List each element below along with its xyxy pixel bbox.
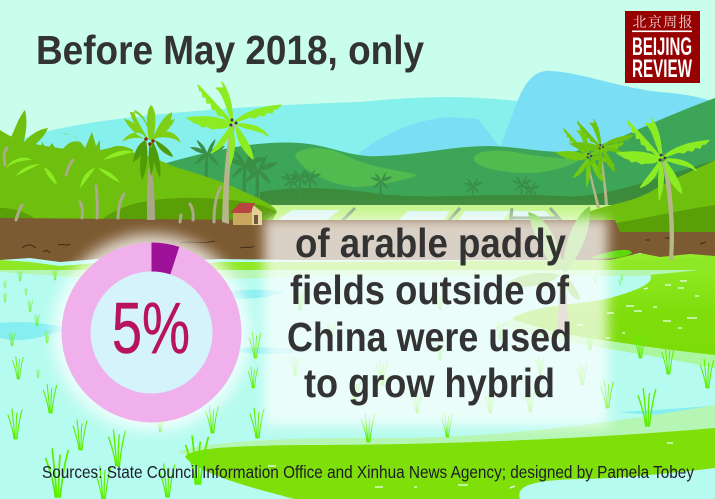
field flecks (268, 269, 700, 488)
left hills (0, 130, 277, 225)
green bank under soil (0, 256, 715, 270)
right green field (512, 250, 715, 358)
coconut palm (122, 105, 181, 220)
white text panel glow (264, 218, 608, 426)
right hill (582, 160, 715, 240)
water streaks (0, 290, 715, 415)
rice tufts (3, 270, 714, 499)
logo: Beijing Review: 北京周报 (632, 12, 692, 32)
hut (230, 203, 262, 225)
percent label: 5% (112, 289, 190, 369)
soil marks (22, 238, 706, 253)
donut centre (90, 272, 212, 394)
logo: Beijing Review (625, 11, 700, 83)
light palm fronds on left (6, 150, 134, 188)
tall palm (187, 82, 281, 224)
body text: of arable paddy (295, 220, 566, 266)
short trunks on left (4, 148, 221, 222)
terraced paddies (270, 205, 615, 245)
body text: fields outside of (290, 267, 569, 313)
right field patch (590, 250, 632, 259)
donut chart: 5% (52, 234, 250, 432)
right palms (556, 118, 709, 260)
dark hill strip (260, 160, 715, 215)
title: Before May 2018, only (36, 27, 424, 73)
distant green hills (160, 98, 715, 212)
donut glow (52, 234, 250, 432)
brown soil strip (0, 218, 715, 262)
far cyan mountains (20, 97, 525, 180)
lighter hill patches (295, 148, 580, 187)
water (0, 255, 715, 499)
bottom right water (519, 468, 715, 499)
body text (287, 220, 572, 406)
left bushy palms (8, 110, 133, 160)
bottom green field (178, 405, 715, 499)
5 percent wedge (152, 242, 179, 274)
distant palm silhouettes (190, 139, 540, 206)
banana plant (505, 206, 590, 331)
body text: China were used (287, 314, 572, 360)
blue mountains (355, 71, 715, 180)
donut ring (62, 242, 242, 422)
body text: to grow hybrid (304, 360, 555, 406)
faded rice tufts (291, 274, 623, 413)
